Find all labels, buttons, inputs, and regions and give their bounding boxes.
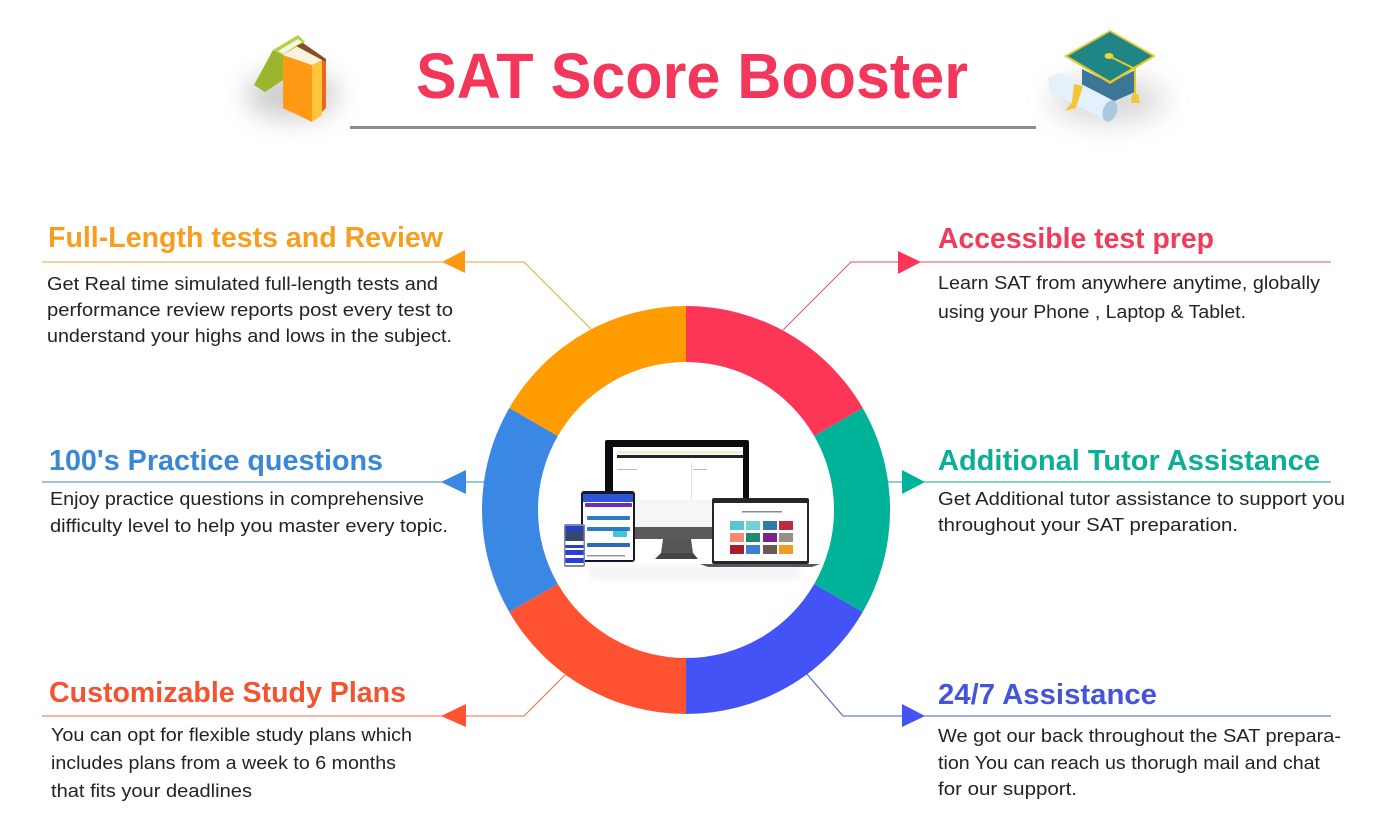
arrow xyxy=(441,704,466,727)
callout: Full-Length tests and Review xyxy=(42,222,591,346)
ring segment: red xyxy=(686,306,863,436)
connector xyxy=(806,673,1331,716)
callout: Accessible test prep xyxy=(783,223,1331,330)
title underline xyxy=(350,126,1036,129)
connector xyxy=(42,481,484,483)
connector xyxy=(42,262,591,329)
callout: 24/7 Assistance xyxy=(806,673,1341,799)
ring segment: blue xyxy=(482,408,558,612)
heading: Accessible test prep xyxy=(938,223,1214,255)
laptop xyxy=(700,498,820,567)
description: You can opt for flexible study plans which xyxy=(51,724,412,745)
description: Enjoy practice questions in comprehensive xyxy=(50,488,424,509)
description xyxy=(938,272,1321,322)
description: We got our back throughout the SAT prepara- xyxy=(938,725,1341,746)
description xyxy=(50,488,448,536)
description: includes plans from a week to 6 months xyxy=(51,752,396,773)
description: performance review reports post every test to xyxy=(47,299,453,320)
ring segment: orange-red xyxy=(509,584,686,714)
description: understand your highs and lows in the subject. xyxy=(47,325,452,346)
ring chart xyxy=(482,306,890,714)
connector xyxy=(783,262,1331,330)
icon: books xyxy=(246,35,338,122)
arrow xyxy=(902,470,925,494)
phone xyxy=(564,524,585,567)
arrow xyxy=(442,250,465,273)
description xyxy=(51,724,412,801)
callout: Customizable Study Plans xyxy=(42,674,566,801)
ring segment: orange xyxy=(509,306,686,436)
connector xyxy=(42,674,566,716)
description: Get Real time simulated full-length tests and xyxy=(47,273,438,294)
ring segment: teal xyxy=(814,408,890,612)
title: SAT Score Booster xyxy=(416,40,968,112)
heading: 24/7 Assistance xyxy=(938,679,1157,711)
description: that fits your deadlines xyxy=(51,780,252,801)
callout: Additional Tutor Assistance xyxy=(888,445,1345,535)
device mockups xyxy=(564,440,820,580)
heading: Full-Length tests and Review xyxy=(48,222,443,254)
description: Learn SAT from anywhere anytime, globally xyxy=(938,272,1321,293)
description: throughout your SAT preparation. xyxy=(938,514,1238,535)
icon: graduation cap and diploma xyxy=(1048,30,1166,124)
tablet xyxy=(581,491,635,562)
arrow xyxy=(902,704,925,727)
heading: 100's Practice questions xyxy=(49,445,383,477)
description: difficulty level to help you master every topic. xyxy=(50,515,448,536)
description xyxy=(938,725,1341,799)
description: Get Additional tutor assistance to support you xyxy=(938,488,1345,509)
arrow xyxy=(898,251,921,274)
description xyxy=(938,488,1345,535)
description: tion You can reach us thorugh mail and chat xyxy=(938,752,1320,773)
callout: 100's Practice questions xyxy=(42,445,484,536)
description: using your Phone , Laptop & Tablet. xyxy=(938,301,1246,322)
ring segment: indigo xyxy=(686,584,863,714)
arrow xyxy=(441,470,466,494)
connector xyxy=(888,481,1331,483)
heading: Customizable Study Plans xyxy=(49,677,406,709)
description xyxy=(47,273,453,346)
desktop monitor xyxy=(605,440,749,559)
heading: Additional Tutor Assistance xyxy=(938,445,1320,477)
description: for our support. xyxy=(938,778,1077,799)
